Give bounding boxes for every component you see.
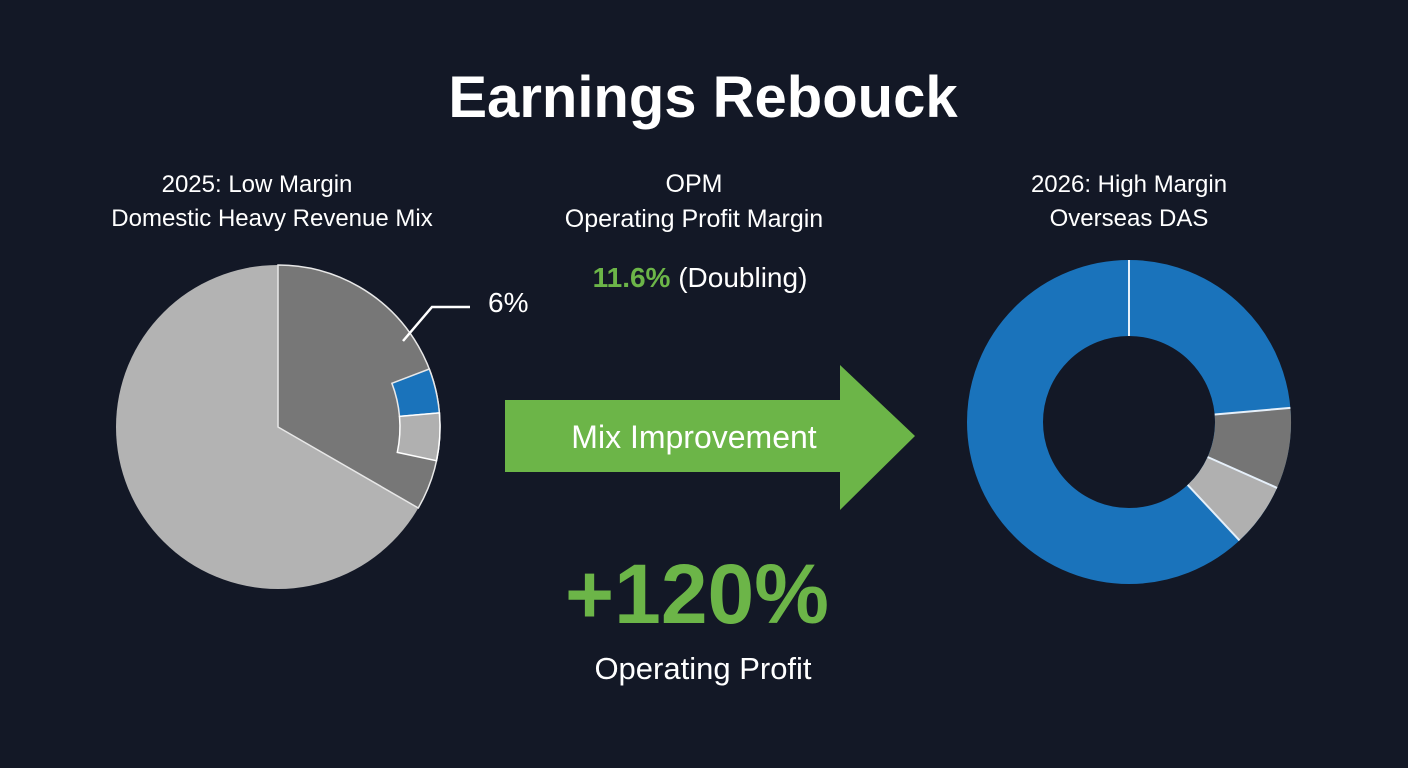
OPM value: 11.6% (Doubling)	[593, 262, 807, 293]
center heading: OPM	[565, 170, 823, 233]
center heading: OPM: Operating Profit Margin	[565, 205, 823, 233]
left heading: 2025: Low Margin	[162, 171, 352, 198]
right heading: 2026: High Margin	[1031, 171, 1227, 198]
arrow: Mix Improvement	[505, 365, 915, 510]
donut chart: 2026	[1005, 260, 1291, 546]
left heading	[111, 171, 433, 232]
big stat: +120%: +120%	[565, 547, 829, 641]
pie chart: 2025	[116, 265, 440, 589]
callout: 6%: 6%	[488, 287, 528, 318]
left heading: Domestic Heavy Revenue Mix	[111, 205, 433, 232]
stat label: Operating Profit	[594, 651, 812, 686]
right heading	[1031, 171, 1227, 232]
arrow: Mix Improvement: Mix Improvement	[571, 419, 817, 455]
right heading: Overseas DAS	[1050, 205, 1208, 232]
center heading: OPM: OPM	[666, 170, 722, 198]
title: Earnings Rebouck	[448, 65, 958, 130]
callout: 6%	[403, 287, 528, 341]
